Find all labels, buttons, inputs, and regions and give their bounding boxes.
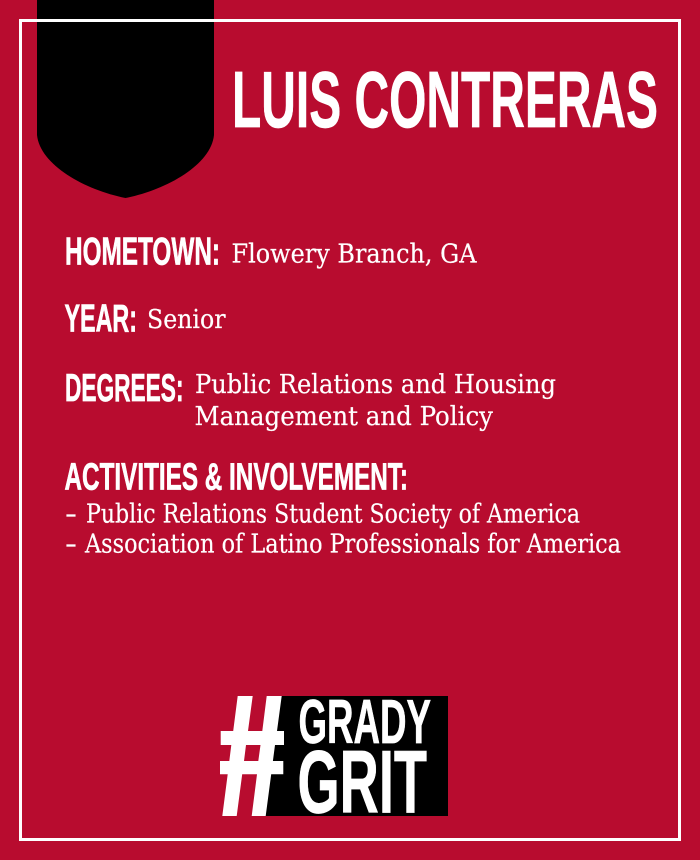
year value: Senior bbox=[147, 305, 226, 335]
degrees label: DEGREES: bbox=[65, 367, 184, 410]
activities list: - bbox=[65, 500, 77, 530]
logo: #GradyGrit bbox=[220, 688, 448, 832]
logo black box bbox=[264, 696, 448, 816]
year label: YEAR: bbox=[64, 298, 137, 340]
icon: hash mark bbox=[220, 696, 284, 816]
hometown value: Flowery Branch, GA bbox=[232, 240, 478, 270]
degrees value: Management and Policy bbox=[194, 402, 493, 432]
icon: black shield banner bbox=[37, 0, 214, 198]
activities list: Public Relations Student Society of America bbox=[86, 500, 580, 530]
activities list bbox=[65, 500, 621, 560]
degrees value: Public Relations and Housing bbox=[195, 370, 556, 400]
activities list: Association of Latino Professionals for America bbox=[84, 530, 621, 560]
logo word: grady: GRADY bbox=[298, 688, 431, 757]
degrees value bbox=[194, 370, 556, 432]
logo word: grit: GRIT bbox=[298, 732, 427, 832]
panel: profile details bbox=[64, 230, 621, 560]
activities list: - bbox=[65, 530, 77, 560]
hometown label: HOMETOWN: bbox=[65, 230, 220, 273]
activities heading: ACTIVITIES & INVOLVEMENT: bbox=[64, 456, 408, 498]
